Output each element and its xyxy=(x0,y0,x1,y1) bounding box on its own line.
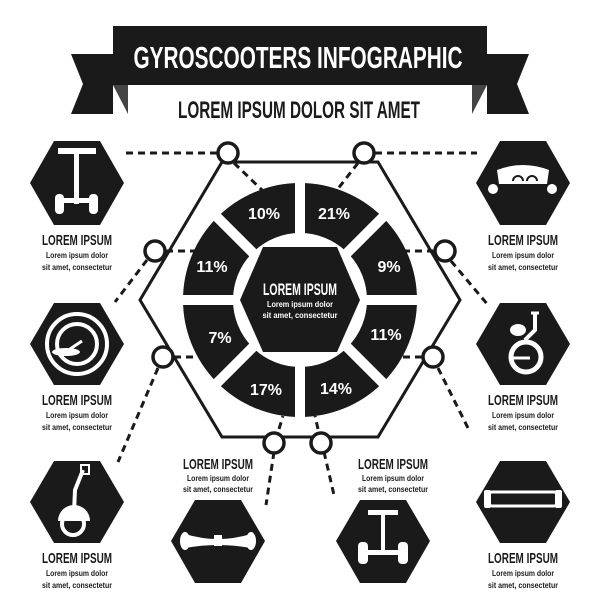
big hexagon outline xyxy=(140,162,460,437)
label: left 3: Lorem ipsum dolor xyxy=(46,568,109,578)
ring chart: 21% xyxy=(318,206,350,223)
label: bottom middle right: sit amet, consectetur xyxy=(358,484,429,494)
panel: right 3 hoverboard top xyxy=(476,461,570,543)
label: right 1 xyxy=(488,232,559,272)
label: right 1: LOREM IPSUM xyxy=(488,232,558,249)
label: left 2 xyxy=(42,392,113,432)
panel: left 2 monowheel xyxy=(30,303,124,385)
center hexagon: LOREM IPSUM xyxy=(263,280,337,299)
label: right 3 xyxy=(488,550,559,590)
label: left 1: LOREM IPSUM xyxy=(42,232,112,249)
label: left 2: sit amet, consectetur xyxy=(42,422,113,432)
label: bottom middle right xyxy=(358,456,429,494)
ring chart: 11% xyxy=(370,327,402,344)
banner xyxy=(71,26,529,114)
center hexagon xyxy=(240,247,360,352)
ring chart: 9% xyxy=(377,259,401,276)
ring chart: 7% xyxy=(208,330,232,347)
ring chart xyxy=(170,170,430,430)
ring chart: 17% xyxy=(250,382,282,399)
label: left 1 xyxy=(42,232,113,272)
ring chart: 14% xyxy=(320,381,352,398)
label: right 1: Lorem ipsum dolor xyxy=(492,250,555,260)
label: bottom middle right: Lorem ipsum dolor xyxy=(362,473,425,483)
center hexagon: sit amet, consectetur xyxy=(262,310,338,320)
panel: left 3 unicycle xyxy=(30,461,124,543)
panel: left 1 segway xyxy=(30,141,124,225)
center hexagon: Lorem ipsum dolor xyxy=(267,299,334,309)
label: left 3: LOREM IPSUM xyxy=(42,550,112,567)
label: bottom middle left: sit amet, consectetur xyxy=(183,484,254,494)
label: left 2: Lorem ipsum dolor xyxy=(46,410,109,420)
label: bottom middle right: LOREM IPSUM xyxy=(358,456,428,473)
label: bottom middle left: Lorem ipsum dolor xyxy=(187,473,250,483)
label: bottom middle left: LOREM IPSUM xyxy=(183,456,253,473)
connector circles xyxy=(145,143,455,453)
panel: right 2 solowheel xyxy=(476,303,570,385)
label: left 3: sit amet, consectetur xyxy=(42,580,113,590)
label: right 2: sit amet, consectetur xyxy=(488,422,559,432)
label: right 2: LOREM IPSUM xyxy=(488,392,558,409)
label: left 3 xyxy=(42,550,113,590)
ring chart: 11% xyxy=(196,259,228,276)
label: left 1: sit amet, consectetur xyxy=(42,262,113,272)
label: right 2 xyxy=(488,392,559,432)
panel: bottom middle left hoverboard xyxy=(171,500,265,583)
label: bottom middle left xyxy=(183,456,254,494)
label: right 2: Lorem ipsum dolor xyxy=(492,410,555,420)
label: left 1: Lorem ipsum dolor xyxy=(46,250,109,260)
panel: bottom middle right segway xyxy=(336,500,430,583)
ring chart: 10% xyxy=(248,206,280,223)
label: right 3: LOREM IPSUM xyxy=(488,550,558,567)
label: right 3: Lorem ipsum dolor xyxy=(492,568,555,578)
label: right 1: sit amet, consectetur xyxy=(488,262,559,272)
dashed connectors xyxy=(115,153,488,505)
panel: right 1 board xyxy=(476,141,570,225)
subtitle: LOREM IPSUM DOLOR SIT AMET xyxy=(178,97,420,124)
label: right 3: sit amet, consectetur xyxy=(488,580,559,590)
label: left 2: LOREM IPSUM xyxy=(42,392,112,409)
